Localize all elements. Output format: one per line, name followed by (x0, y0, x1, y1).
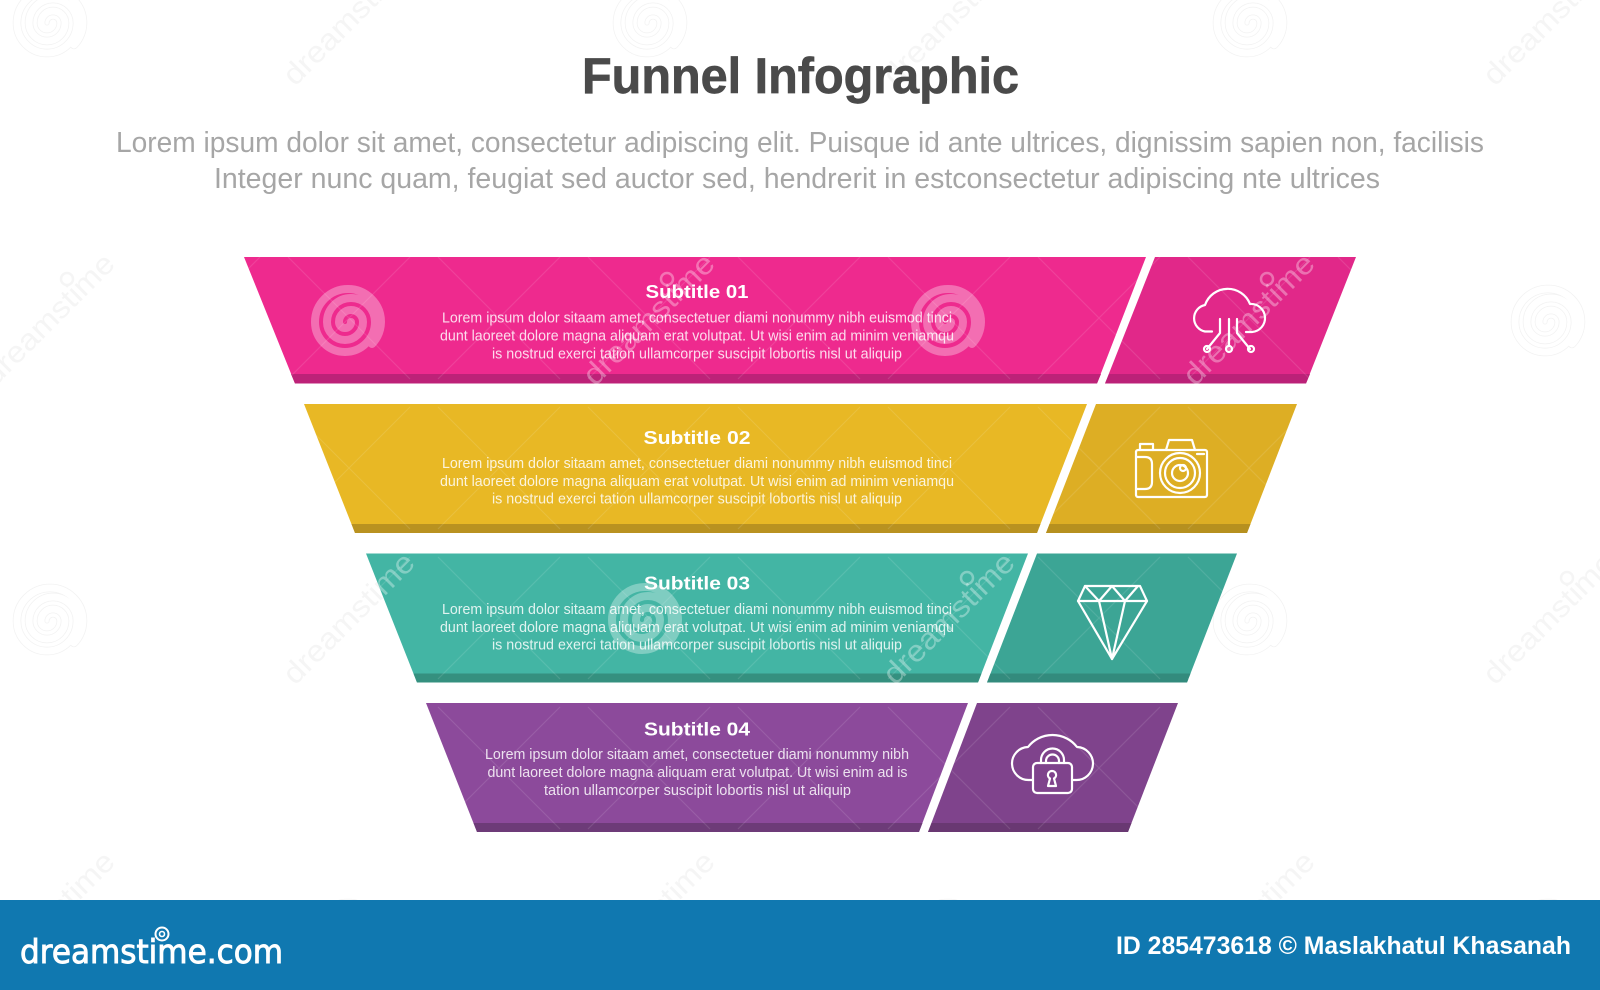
icon: diamond (1078, 586, 1147, 659)
footer bar (0, 900, 1600, 990)
text block: subtitle 01: Subtitle 01 (646, 281, 748, 302)
text block: subtitle 02: Subtitle 02 (644, 427, 750, 448)
footer credit: ID 285473618 © Maslakhatul Khasanah (1116, 932, 1571, 960)
watermark overlay on bands (248, 257, 1351, 830)
text block: subtitle 04 (485, 719, 909, 799)
title: Funnel Infographic (582, 48, 1019, 104)
icon: camera (1136, 440, 1207, 497)
text block: subtitle 01 (440, 281, 954, 362)
watermark: diagonal text on white: dreamstime (277, 546, 422, 691)
watermark overlay on bands: dreamstime (1177, 247, 1322, 392)
text block: subtitle 03: Subtitle 03 (644, 572, 750, 593)
text block: subtitle 02: is nostrud exerci tation ullamcorper suscipit lobortis nisl ut aliquip (492, 490, 902, 508)
text block: subtitle 01: is nostrud exerci tation ullamcorper suscipit lobortis nisl ut aliquip (492, 345, 902, 362)
text block: subtitle 01: dunt laoreet dolore magna aliquam erat volutpat. Ut wisi enim ad minim veniamqu (440, 328, 954, 345)
text block: subtitle 01: Lorem ipsum dolor sitaam amet, consectetuer diami nonummy nibh euismod tinci (442, 310, 952, 327)
watermark overlay on bands: dreamstime (877, 546, 1022, 691)
watermark: diagonal text on white: dreamstime (1177, 845, 1322, 990)
watermark: diagonal text on white: dreamstime (577, 845, 722, 990)
text block: subtitle 02 (440, 427, 954, 508)
footer logo: dreamstime.com (20, 932, 283, 971)
text block: subtitle 03: Lorem ipsum dolor sitaam amet, consectetuer diami nonummy nibh euismod tinci (442, 601, 952, 618)
funnel band shapes: pink (244, 257, 1356, 384)
text block: subtitle 04: Lorem ipsum dolor sitaam amet, consectetuer diami nonummy nibh (485, 746, 909, 763)
text block: subtitle 04: dunt laoreet dolore magna aliquam erat volutpat. Ut wisi enim ad is (488, 764, 908, 781)
text block: subtitle 03: dunt laoreet dolore magna aliquam erat volutpat. Ut wisi enim ad minim veniamqu (440, 619, 954, 636)
funnel band shapes: yellow (304, 404, 1297, 533)
description text: Integer nunc quam, feugiat sed auctor sed, hendrerit in estconsectetur adipiscing nte ultrices (214, 163, 1380, 195)
text block: subtitle 04: Subtitle 04 (644, 719, 751, 740)
icon: cloud network (1194, 289, 1265, 352)
text block: subtitle 02: Lorem ipsum dolor sitaam amet, consectetuer diami nonummy nibh euismod tinci (442, 455, 952, 472)
description text (116, 127, 1484, 195)
text block: subtitle 02: dunt laoreet dolore magna aliquam erat volutpat. Ut wisi enim ad minim veniamqu (440, 473, 954, 490)
icon: cloud padlock (1012, 735, 1093, 793)
text block: subtitle 04: tation ullamcorper suscipit lobortis nisl ut aliquip (544, 782, 851, 799)
watermark overlay on bands: dreamstime (277, 546, 422, 691)
funnel band shapes: purple (426, 703, 1178, 832)
funnel band shapes: teal (366, 554, 1237, 682)
description text: Lorem ipsum dolor sit amet, consectetur adipiscing elit. Puisque id ante ultrices, dignissim sapien non, facilisis (116, 127, 1484, 159)
text block: subtitle 03: is nostrud exerci tation ullamcorper suscipit lobortis nisl ut aliquip (492, 636, 902, 654)
watermark overlay on bands: dreamstime (577, 247, 722, 392)
text block: subtitle 03 (440, 572, 954, 654)
